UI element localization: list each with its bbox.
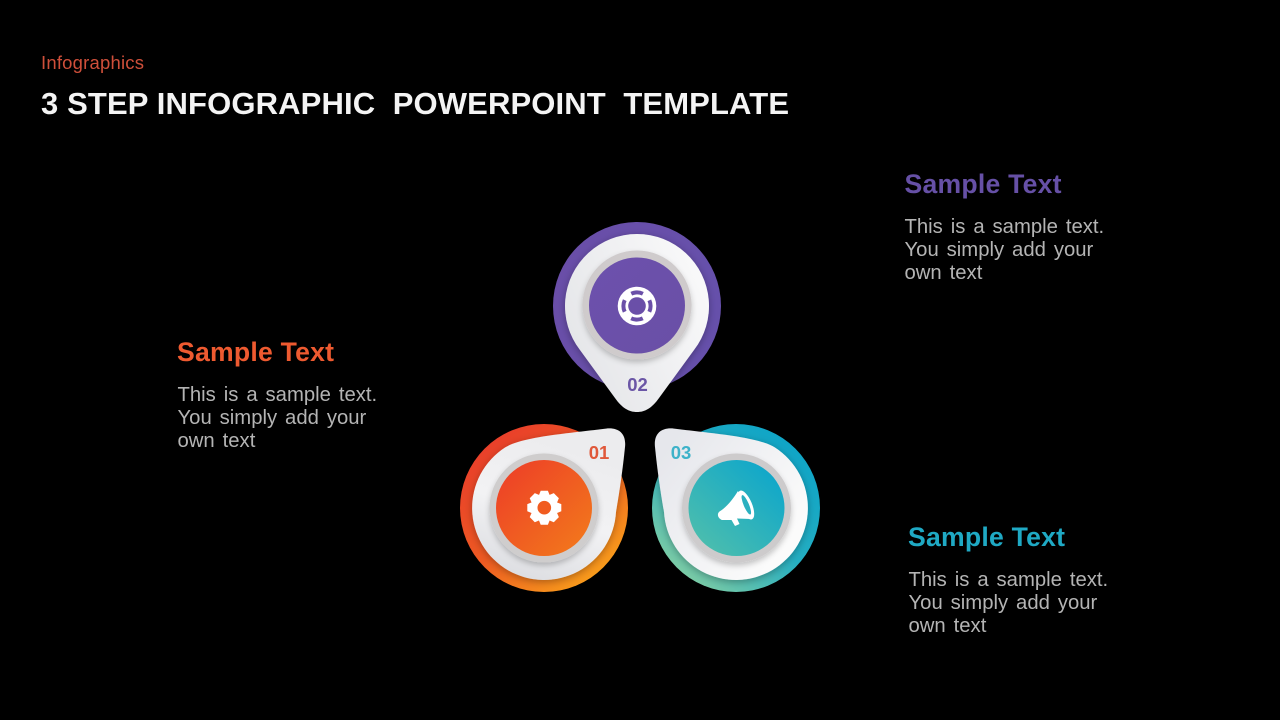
heading: Sample Text xyxy=(908,522,1065,552)
step 01 marker xyxy=(460,424,628,592)
purple inner disc xyxy=(589,258,685,354)
grey ring xyxy=(682,454,791,562)
step 03 marker xyxy=(652,424,820,592)
outer purple disc xyxy=(553,222,721,390)
body: This is a sample text. xyxy=(178,384,377,406)
body: own text xyxy=(904,262,983,284)
text block: step 02 xyxy=(904,169,1104,284)
icon: gear xyxy=(527,491,561,525)
icon: lifebuoy xyxy=(618,287,656,325)
grey ring xyxy=(582,250,692,360)
icon: megaphone xyxy=(718,488,758,526)
body: This is a sample text. xyxy=(904,216,1104,238)
white pin pointing upper right xyxy=(472,428,625,580)
heading: Sample Text xyxy=(177,337,334,367)
body: You simply add your xyxy=(908,592,1098,614)
heading: Sample Text xyxy=(904,169,1062,199)
number 01: 01 xyxy=(589,442,609,463)
white pin pointing upper left xyxy=(655,428,808,580)
white pin pointing down xyxy=(565,234,709,412)
body: own text xyxy=(178,430,256,452)
number 02: 02 xyxy=(627,374,648,395)
body: This is a sample text. xyxy=(908,569,1108,591)
eyebrow label: Infographics xyxy=(41,52,144,73)
body: You simply add your xyxy=(904,239,1094,261)
title: 3 STEP INFOGRAPHIC POWERPOINT TEMPLATE xyxy=(41,86,789,121)
body: You simply add your xyxy=(178,407,367,429)
teal inner disc xyxy=(688,460,784,556)
outer orange disc xyxy=(460,424,628,592)
text block: step 03 xyxy=(908,522,1108,637)
text block: step 01 xyxy=(177,337,377,452)
step 02 marker xyxy=(553,222,721,412)
grey ring xyxy=(490,454,598,562)
outer teal disc xyxy=(652,424,820,592)
number 03: 03 xyxy=(671,442,691,463)
body: own text xyxy=(908,615,987,637)
orange inner disc xyxy=(496,460,592,556)
